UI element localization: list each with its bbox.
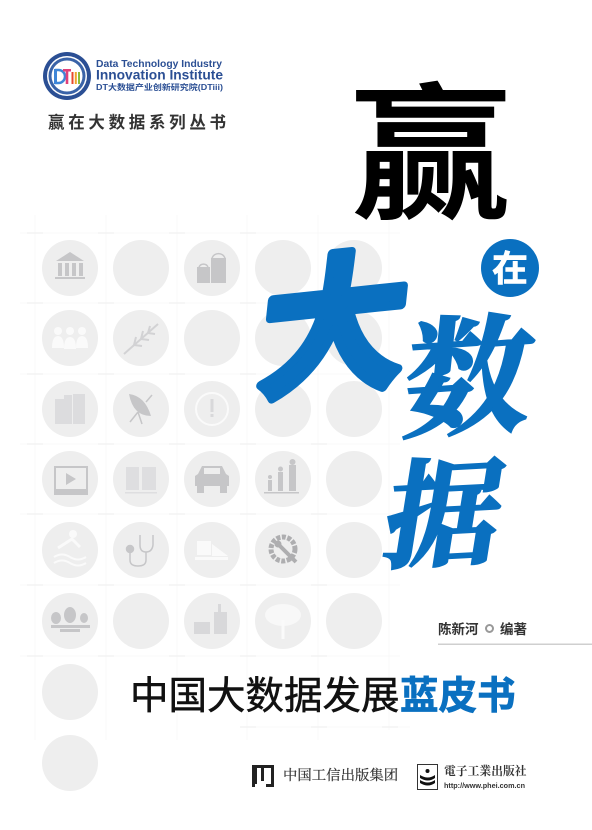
PHEI logo <box>418 764 438 790</box>
series name: 赢在大数据系列丛书 <box>48 112 226 132</box>
badge: 在 <box>481 239 539 297</box>
icon: shopping bags <box>197 254 226 283</box>
publisher name: 中国工信出版集团 <box>283 764 398 785</box>
icon: growing people <box>264 459 299 494</box>
logo emblem <box>43 52 91 100</box>
icon: warning <box>196 393 228 425</box>
icon: video player <box>55 467 87 494</box>
PHEI url: http://www.phei.com.cn <box>444 781 525 790</box>
PHEI name: 電子工業出版社 <box>444 762 527 779</box>
badge: 在: 在 <box>492 240 528 292</box>
icon grid <box>42 240 382 791</box>
icon: bank <box>55 252 85 279</box>
icon: swimmer <box>54 531 86 566</box>
icon: open book <box>125 467 157 494</box>
calligraphy character: 大: 大 <box>250 199 420 432</box>
icon: people group <box>52 327 88 349</box>
author name: 陈新河 <box>438 621 479 637</box>
author role: 编著 <box>500 621 527 637</box>
publisher: China Industry and Information Publishing Group <box>252 764 398 787</box>
calligraphy character: 据: 据 <box>375 418 517 593</box>
author <box>438 621 592 645</box>
logo text line 1: Data Technology Industry <box>96 58 222 70</box>
logo: DT Innovation Institute <box>43 52 223 100</box>
logo text line 3: DT大数据产业创新研究院(DTiii) <box>96 82 223 92</box>
logo text line 2: Innovation Institute <box>96 68 223 82</box>
icon: factory <box>194 604 227 634</box>
icon: wheat <box>124 324 158 354</box>
subtitle blue part: 蓝皮书 <box>400 665 516 721</box>
icon: buildings <box>55 394 85 424</box>
icon: truck <box>195 541 228 560</box>
author separator <box>486 625 493 632</box>
icon: tree <box>265 604 301 639</box>
publisher icon <box>252 765 274 787</box>
subtitle black part: 中国大数据发展 <box>130 665 400 721</box>
icon: gear and wrench <box>271 537 296 562</box>
subtitle <box>130 665 516 721</box>
icon: car <box>195 466 229 493</box>
icon: audience <box>51 607 90 632</box>
calligraphy character: 数: 数 <box>396 271 543 465</box>
icon: satellite dish <box>129 394 152 424</box>
icon: stethoscope <box>126 535 153 566</box>
publisher: PHEI <box>418 762 527 790</box>
big title character: 赢: 赢 <box>351 37 511 250</box>
